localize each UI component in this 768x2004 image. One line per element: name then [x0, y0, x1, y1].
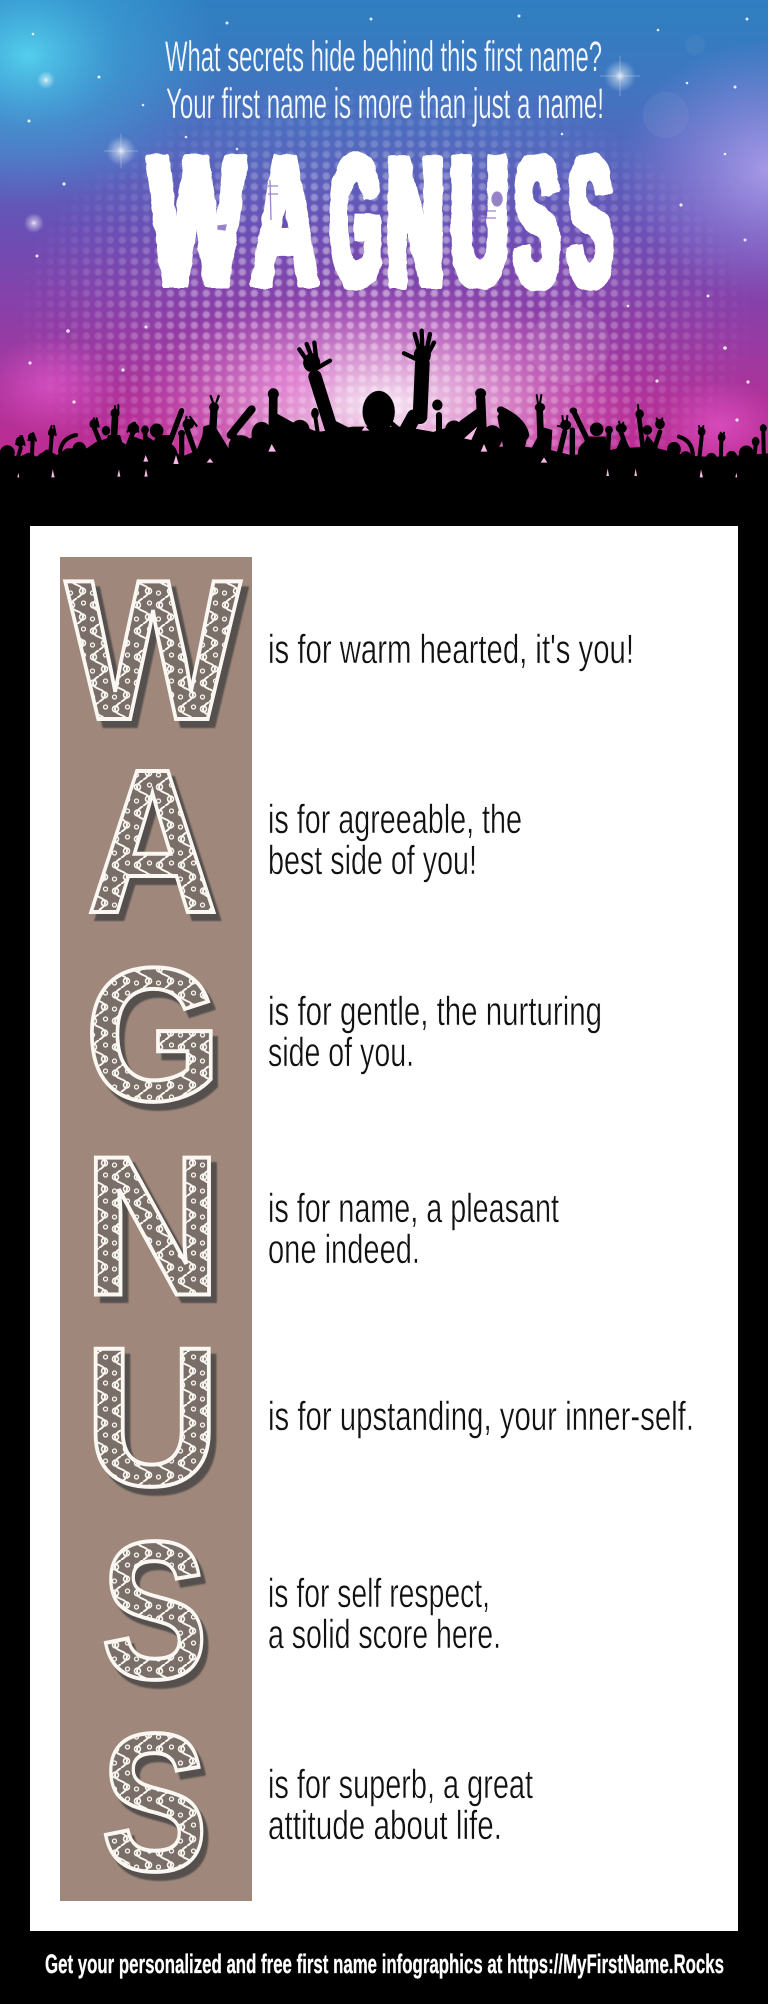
- title: WAGNUSS: [150, 118, 612, 324]
- statement N: [268, 1185, 559, 1272]
- letter N: N: [83, 1116, 222, 1338]
- panel: white content card: [30, 526, 738, 931]
- crowd silhouette: [0, 331, 768, 530]
- statement S second: attitude about life.: [268, 1802, 502, 1848]
- statement A: best side of you!: [268, 837, 477, 883]
- letter S second: S: [106, 1700, 213, 1919]
- title: WAGNUSS: A: [253, 118, 317, 323]
- title: WAGNUSS: S: [515, 119, 559, 324]
- letter G: G: [90, 936, 227, 1148]
- statement A: [268, 796, 522, 883]
- statement S: a solid score here.: [268, 1611, 501, 1657]
- letter S: S: [101, 1501, 208, 1720]
- letter G: G: [85, 929, 222, 1141]
- text: S: [569, 119, 612, 324]
- statement S: [268, 1570, 501, 1657]
- letter S second: S: [101, 1693, 208, 1912]
- panel: concert hero background: [0, 0, 768, 457]
- panel: letter column: [60, 557, 252, 1901]
- title: WAGNUSS: U: [451, 118, 508, 323]
- statement S second: [268, 1761, 533, 1848]
- statement S: is for self respect,: [268, 1570, 490, 1616]
- letter A: A: [86, 727, 218, 956]
- letter A: A: [92, 734, 224, 963]
- letter W: W: [65, 539, 241, 762]
- statement G: side of you.: [268, 1029, 414, 1075]
- statement G: is for gentle, the nurturing: [268, 988, 602, 1034]
- sparkles: [24, 14, 750, 422]
- headline: intro question: [165, 33, 604, 128]
- letter U: U: [84, 1306, 220, 1527]
- letter N: N: [89, 1122, 228, 1344]
- title: WAGNUSS: G: [331, 118, 381, 323]
- title: WAGNUSS: N: [387, 119, 443, 324]
- statement N: is for name, a pleasant: [268, 1185, 559, 1231]
- statement A: is for agreeable, the: [268, 796, 522, 842]
- left half of crowd: [0, 343, 403, 480]
- title: WAGNUSS: W: [150, 118, 243, 323]
- statement W: is for warm hearted, it's you!: [268, 626, 634, 672]
- statement G: [268, 988, 602, 1075]
- statement N: one indeed.: [268, 1226, 420, 1272]
- letter U: U: [90, 1313, 226, 1534]
- statement S second: is for superb, a great: [268, 1761, 533, 1807]
- right half of crowd: [381, 331, 768, 480]
- letter S: S: [106, 1508, 213, 1727]
- letter W: W: [71, 546, 247, 769]
